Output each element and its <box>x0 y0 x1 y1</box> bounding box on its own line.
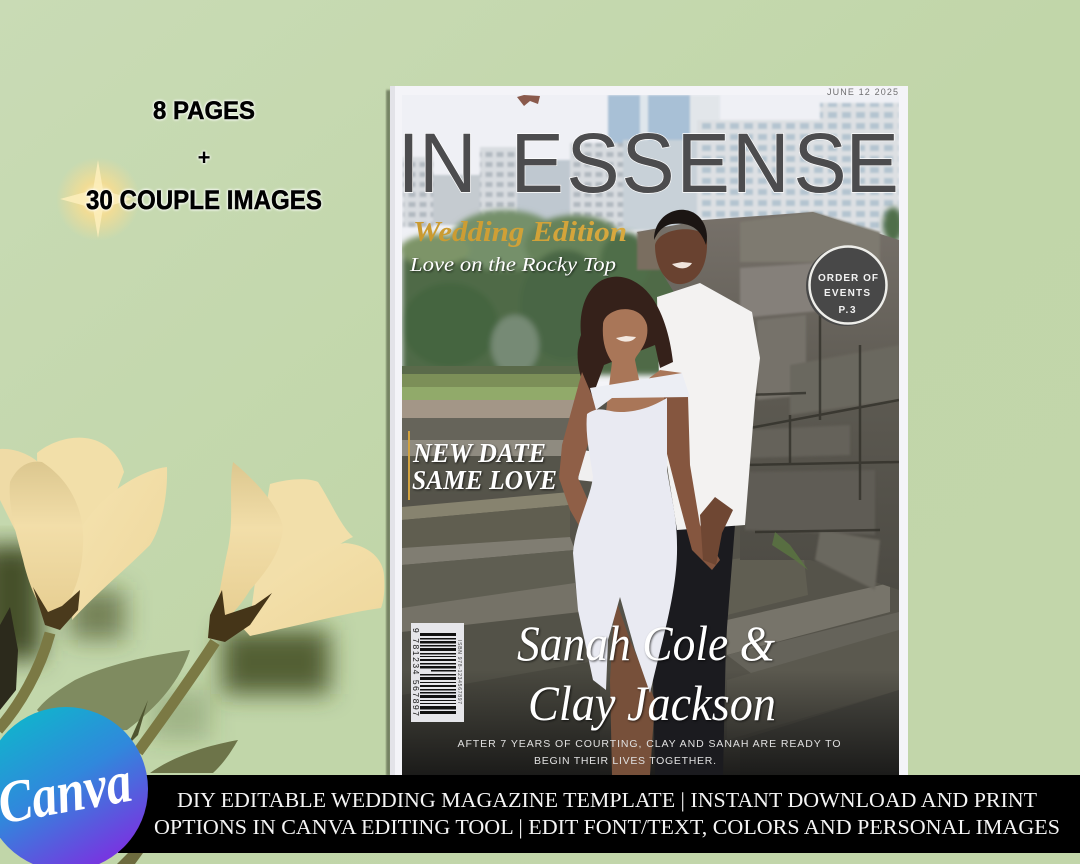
cover date: JUNE 12 2025 <box>827 87 898 97</box>
man hand and watch <box>700 497 733 565</box>
barcode: 9 781234 567897 <box>411 628 421 716</box>
promo text: pages and images <box>56 97 322 241</box>
man sleeve at waist <box>578 450 593 482</box>
trees <box>400 207 903 375</box>
woman hair <box>578 277 673 398</box>
bottom banner: DIY EDITABLE WEDDING MAGAZINE TEMPLATE | INSTANT DOWNLOAD AND PRINT <box>177 788 1037 812</box>
flowers <box>0 438 384 864</box>
tagline: Love on the Rocky Top <box>409 254 616 276</box>
badge: order of events <box>806 246 886 326</box>
barcode: ISBN 978-1234567897 <box>456 640 462 704</box>
stone wall <box>637 212 899 590</box>
caption: AFTER 7 YEARS OF COURTING, CLAY AND SANAH ARE READY TO <box>458 738 840 750</box>
promo line: 8 pages: 8 PAGES <box>153 97 255 125</box>
names <box>517 615 776 731</box>
headline: new date same love: NEW DATE <box>412 438 546 468</box>
moss <box>772 532 808 570</box>
canva logo <box>0 707 148 864</box>
woman shoulder band <box>590 373 690 410</box>
woman leg <box>610 597 655 775</box>
badge: order of events: ORDER OF <box>818 273 878 284</box>
woman dress <box>573 398 677 693</box>
blot <box>517 95 540 106</box>
woman smile <box>616 336 636 342</box>
flower shadows <box>0 545 330 740</box>
man jacket <box>657 283 760 530</box>
leaves <box>0 607 238 773</box>
promo line: 30 couple images: 30 COUPLE IMAGES <box>86 185 322 215</box>
couple <box>559 210 760 775</box>
badge: order of events: EVENTS <box>824 288 870 299</box>
sky <box>402 95 899 245</box>
caption: BEGIN THEIR LIVES TOGETHER. <box>534 755 716 767</box>
icon: star glow <box>56 157 140 241</box>
wedding edition: Wedding Edition <box>413 217 627 248</box>
steps <box>402 400 899 775</box>
cover photo <box>400 95 903 775</box>
woman face and chest <box>603 309 682 420</box>
bottom banner: OPTIONS IN CANVA EDITING TOOL | EDIT FONT/TEXT, COLORS AND PERSONAL IMAGES <box>154 815 1060 839</box>
woman arm right <box>664 396 720 570</box>
magazine page <box>390 86 908 776</box>
man head <box>654 210 707 284</box>
flower left <box>0 438 167 630</box>
barcode <box>411 623 464 722</box>
headline: new date same love <box>408 431 557 500</box>
man trousers <box>652 525 735 775</box>
headline: new date same love: SAME LOVE <box>412 465 557 495</box>
badge: order of events: P.3 <box>838 305 856 316</box>
buildings <box>403 95 899 233</box>
stems <box>0 633 215 752</box>
bottom banner <box>118 775 1080 853</box>
masthead: IN ESSENSE <box>397 117 899 210</box>
magazine <box>386 86 908 776</box>
names: Clay Jackson <box>528 675 776 731</box>
caption <box>458 738 840 767</box>
promo line: plus: + <box>198 145 210 170</box>
grass <box>402 366 581 400</box>
woman arm left <box>559 372 598 525</box>
bottom shade <box>402 684 899 775</box>
names: Sanah Cole & <box>517 615 775 671</box>
stem under banner <box>117 853 143 864</box>
flower right <box>208 462 384 642</box>
magazine shadow <box>386 90 391 776</box>
